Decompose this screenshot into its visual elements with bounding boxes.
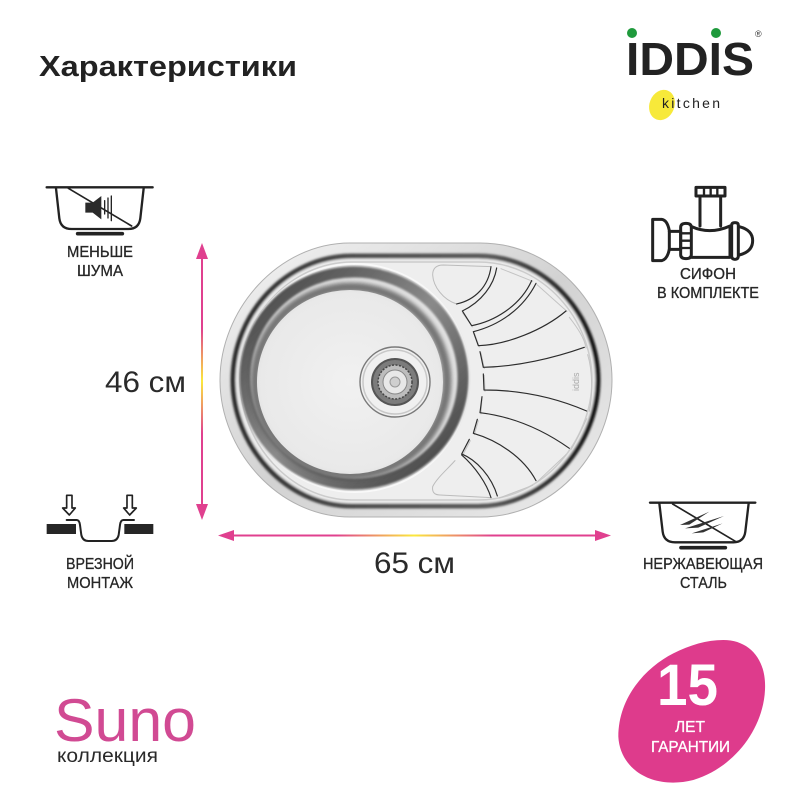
label: siphon included: В КОМПЛЕКТЕ (657, 285, 759, 302)
label: less noise: ШУМА (77, 263, 124, 280)
drain (360, 347, 430, 417)
brand stamp: iddis (571, 372, 581, 391)
label: stainless steel: НЕРЖАВЕЮЩАЯ (643, 556, 763, 573)
icon: less noise (47, 187, 153, 234)
sink bowl (241, 264, 469, 492)
label: less noise (67, 244, 133, 280)
logo: iddis kitchen: kitchen (662, 95, 720, 111)
label: flush mount: ВРЕЗНОЙ (66, 555, 134, 573)
sink illustration (220, 243, 612, 517)
label: flush mount (66, 555, 134, 592)
warranty badge: 15 (657, 653, 718, 718)
warranty badge (618, 640, 765, 783)
label: stainless steel: СТАЛЬ (680, 575, 727, 592)
dimension: height: 46 см (105, 366, 186, 399)
warranty badge: ГАРАНТИИ (651, 739, 730, 756)
label: siphon included: СИФОН (680, 266, 736, 283)
warranty badge: ЛЕТ (675, 719, 706, 736)
logo: iddis kitchen: IDDIS (626, 33, 754, 85)
title: Характеристики (39, 51, 297, 83)
icon: flush mount (47, 495, 153, 541)
arrow: width (218, 530, 611, 541)
icon: stainless steel (650, 503, 755, 548)
collection name: Suno (54, 687, 196, 754)
icon: siphon (653, 187, 753, 261)
logo: iddis kitchen (626, 28, 762, 124)
label: stainless steel (643, 556, 763, 592)
logo: iddis kitchen: ® (755, 29, 762, 39)
label: siphon included (657, 266, 759, 302)
collection label: коллекция (57, 746, 158, 767)
label: flush mount: МОНТАЖ (67, 575, 134, 592)
drainboard ridges (433, 265, 592, 498)
label: less noise: МЕНЬШЕ (67, 244, 133, 261)
arrow: height (196, 243, 208, 520)
dimension: width: 65 см (374, 547, 455, 580)
